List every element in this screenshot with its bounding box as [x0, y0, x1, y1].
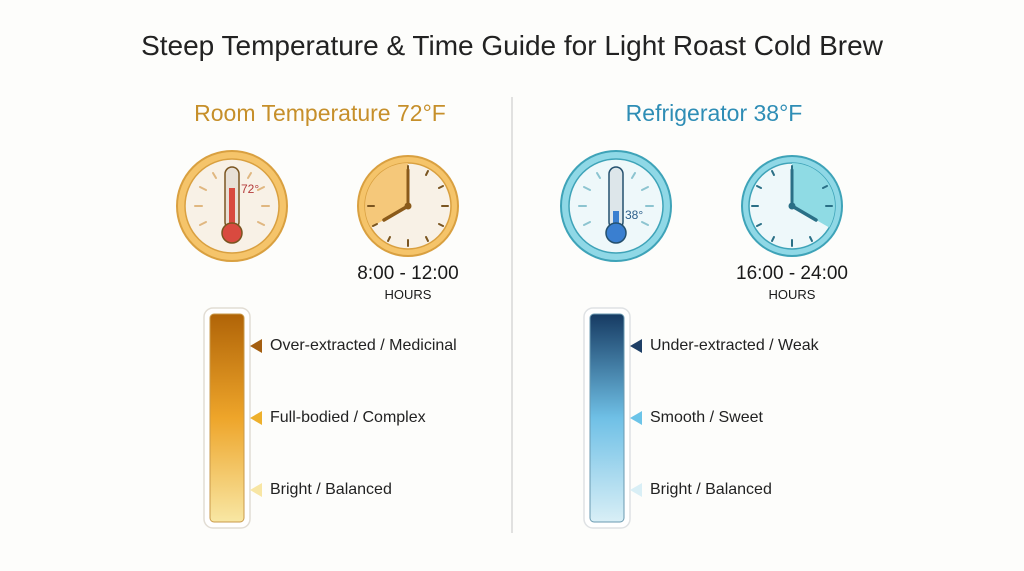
cold extraction bar: [584, 308, 642, 528]
icon: warm thermometer dial: 72°: [241, 182, 259, 196]
cold time label: [736, 263, 848, 302]
icon: cold clock: [742, 156, 842, 256]
icon: cold thermometer dial: 38°: [625, 208, 643, 222]
cold labels: Bright / Balanced: [650, 481, 772, 498]
warm time label: [357, 263, 459, 302]
warm time label: HOURS: [385, 287, 431, 302]
cold time label: HOURS: [769, 287, 815, 302]
warm labels: [270, 337, 457, 498]
title: Steep Temperature & Time Guide for Light Roast Cold Brew: [141, 30, 883, 61]
cold time label: 16:00 - 24:00: [736, 263, 848, 284]
warm extraction bar: [204, 308, 262, 528]
warm labels: Full-bodied / Complex: [270, 409, 426, 426]
warm labels: Bright / Balanced: [270, 481, 392, 498]
icon: warm thermometer dial: [177, 151, 287, 261]
warm labels: Over-extracted / Medicinal: [270, 337, 457, 354]
icon: warm clock: [358, 156, 458, 256]
heading: room temperature: Room Temperature 72°F: [194, 100, 446, 126]
heading: refrigerator: Refrigerator 38°F: [626, 100, 802, 126]
cold labels: Under-extracted / Weak: [650, 337, 819, 354]
cold labels: Smooth / Sweet: [650, 409, 763, 426]
icon: cold thermometer dial: [561, 151, 671, 261]
warm time label: 8:00 - 12:00: [357, 263, 459, 284]
cold labels: [650, 337, 819, 498]
